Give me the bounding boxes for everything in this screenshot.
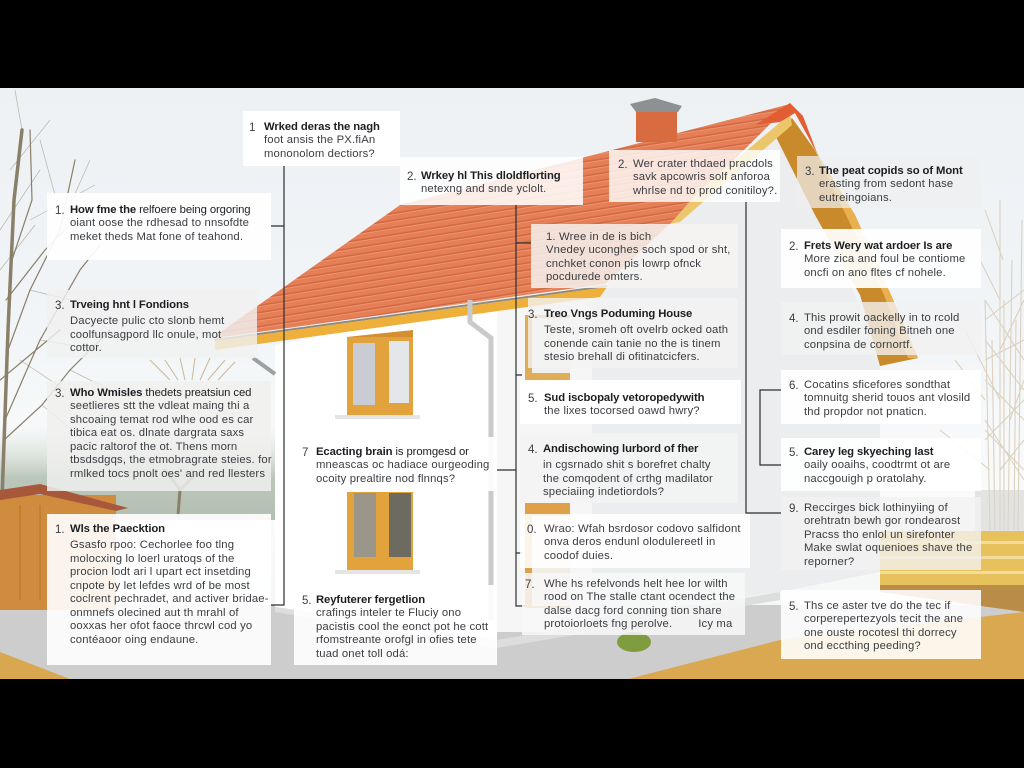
- text: The peat copids so of Mont: [819, 164, 963, 176]
- text: reporner?: [804, 556, 854, 568]
- text: [70, 386, 272, 480]
- text: [544, 392, 704, 417]
- distant trees left: [0, 425, 290, 520]
- text: [264, 120, 380, 160]
- number: 5.: [302, 594, 312, 606]
- callout: left question 1: [47, 193, 271, 260]
- number: 1.: [55, 524, 65, 536]
- number: 3.: [55, 388, 65, 400]
- text: eutreingoians.: [819, 192, 892, 204]
- number: 3.: [55, 300, 65, 312]
- chimney: [630, 98, 682, 142]
- text: onva deros endunl olodulereetl in: [544, 536, 715, 548]
- number: 2.: [789, 240, 799, 252]
- callout: left question 3: [47, 290, 257, 358]
- right haze: [975, 490, 1024, 535]
- text: corperepertezyols tecit the ane: [804, 613, 963, 625]
- text: onmnefs olecined aut th mrahl of: [70, 606, 239, 618]
- text: How fme the relfoere being orgoring: [70, 204, 250, 216]
- callout: wall question 5: [520, 380, 741, 424]
- text: one ouste rocotesl thi dorrecy: [804, 626, 957, 638]
- callout: right question 4: [781, 302, 981, 355]
- text: coclrent pechradet, and activer bridae-: [70, 593, 269, 605]
- text: the lixes tocorsed oawd hwry?: [544, 405, 700, 417]
- text: mneascas oc hadiace ourgeoding: [316, 459, 489, 471]
- text: [804, 446, 950, 484]
- text: orehtratn bewh gor rondearost: [804, 515, 960, 527]
- callout: left question 1 long: [47, 514, 271, 665]
- number: 5.: [789, 446, 799, 458]
- callout: roof question 2: [400, 157, 583, 205]
- text: [70, 522, 269, 646]
- callout: gable question 3: [797, 156, 981, 208]
- text: [804, 600, 963, 652]
- text: coolfunsagpord llc onule, mot: [70, 328, 221, 340]
- text: speciaiing indetiordols?: [543, 486, 664, 498]
- text: foot ansis the PX.fiAn: [264, 134, 375, 146]
- text: ocoity prealtire nod flnnqs?: [316, 472, 455, 484]
- text: [804, 502, 972, 568]
- text: meket theds Mat fone of teahond.: [70, 230, 243, 242]
- text: Wrked deras the nagh: [264, 120, 380, 132]
- text: [421, 170, 561, 195]
- text: netexng and snde yclolt.: [421, 183, 546, 195]
- number: 3.: [528, 308, 538, 320]
- text: ond esdiler foning Bitneh one: [804, 325, 955, 337]
- gable trim: [670, 103, 918, 366]
- number: 7.: [525, 578, 535, 590]
- text: shcoaing temat rod wlhe ood es car: [70, 414, 253, 426]
- text: Reccirges bick lothinyiing of: [804, 502, 948, 514]
- text: Andischowing lurbord of fher: [543, 442, 698, 454]
- text: erasting from sedont hase: [819, 178, 953, 190]
- house wall: [275, 120, 880, 648]
- number: 5.: [528, 392, 538, 404]
- text: oaily ooaihs, coodtrmt ot are: [804, 459, 950, 471]
- text: cnpote by let lefdes wrd of be most: [70, 580, 250, 592]
- text: Sud iscbopaly vetoropedywith: [544, 392, 704, 404]
- callout: right question 5 lower: [781, 590, 981, 659]
- text: the comqodent of crthg madilator: [543, 472, 713, 484]
- text: Reyfuterer fergetlion: [316, 594, 425, 606]
- text: oncfi on ano fltes cf nohele.: [804, 266, 946, 278]
- shed: [0, 484, 128, 610]
- text: conende cain tanie no the is tinem: [544, 338, 721, 350]
- text: Ecacting brain is promgesd or: [316, 446, 469, 458]
- text: Teste, sromeh oft ovelrb ocked oath: [544, 324, 728, 336]
- number: 5.: [789, 600, 799, 612]
- text: [316, 594, 488, 660]
- small pipe left: [253, 358, 275, 374]
- text: [543, 442, 713, 498]
- text: molocxing lo loerl uratoqs of the: [70, 552, 234, 564]
- number: 3.: [805, 166, 815, 178]
- callout: chimney question 2: [609, 150, 780, 202]
- text: rood on The stalle ctant ocendect the: [544, 591, 735, 603]
- text: rfomstreante orofgl in ofies tete: [316, 634, 477, 646]
- text: thd propdor not pnaticn.: [804, 406, 927, 418]
- text: Carey leg skyeching last: [804, 446, 933, 458]
- text: cottor.: [70, 342, 102, 354]
- text: This prowit oackelly in to rcold: [804, 312, 959, 324]
- text: contéaoor oing endaune.: [70, 634, 198, 646]
- text: oiant oose the rdhesad to nnsofdte: [70, 217, 249, 229]
- number: 1: [249, 122, 255, 134]
- number: 4.: [789, 312, 799, 324]
- text: ooxxas her ofot faoce thrcwl cod yo: [70, 620, 252, 632]
- text: naccgouigh p oratolahy.: [804, 472, 927, 484]
- text: Pracss tho enlol un sirefonter: [804, 528, 955, 540]
- text: 1. Wree in de is bich: [546, 230, 651, 242]
- text: Wrao: Wfah bsrdosor codovo salfidont: [544, 522, 741, 534]
- shrub: [617, 632, 651, 652]
- text: Make swlat oquenioes shave the: [804, 542, 972, 554]
- text: [546, 230, 731, 283]
- text: [633, 158, 777, 196]
- text: ond eccthing peeding?: [804, 640, 921, 652]
- callout: centre question 5: [294, 585, 497, 665]
- text: mononolom dectiors?: [264, 148, 375, 160]
- text: More zica and foul be contiome: [804, 253, 966, 265]
- window right lower: [525, 503, 570, 608]
- text: Treo Vngs Poduming House: [544, 308, 692, 320]
- text: [544, 308, 728, 363]
- number: 7: [302, 446, 308, 458]
- text: Wer crater thdaed pracdols: [633, 158, 773, 170]
- window lower: [335, 492, 420, 574]
- text: cnchket conon pis lowrp ofnck: [546, 258, 701, 270]
- text: Who Wmisles thedets preatsiun ced: [70, 386, 251, 398]
- callout: right question 6: [781, 370, 981, 424]
- text: Whe hs refelvonds helt hee lor wilth: [544, 578, 728, 590]
- sky: [0, 88, 1024, 679]
- text: tbsdsdgqs, the etmobragrate steies. for: [70, 454, 272, 466]
- gutter: [215, 285, 607, 350]
- text: rmlked tocs pnolt oes' and red llesters: [70, 468, 265, 480]
- callout: wall question 4: [520, 433, 738, 503]
- text: [819, 164, 963, 204]
- text: pacistis cool the eonct pot he cott: [316, 620, 488, 632]
- callout: right question 5: [781, 438, 981, 491]
- text: seetlieres stt the vdleat maing thi a: [70, 400, 250, 412]
- downpipe: [470, 300, 491, 620]
- text: [804, 240, 966, 278]
- text: [316, 446, 489, 484]
- text: whrlse nd to prod conitiloy?.: [633, 184, 777, 196]
- tree: right pale: [940, 200, 1024, 530]
- callout: left question 3 long: [47, 381, 271, 491]
- text: Wls the Paecktion: [70, 522, 165, 534]
- callout: centre question 7: [294, 437, 497, 491]
- roof: [215, 104, 790, 338]
- text: Wrkey hl This dloldflorting: [421, 170, 561, 182]
- number: 2.: [407, 170, 417, 182]
- text: Gsasfo rpoo: Cechorlee foo tlng: [70, 539, 234, 551]
- ground: [0, 605, 1024, 679]
- number: 1.: [55, 204, 65, 216]
- text: [804, 378, 970, 418]
- text: conpsina de cornortf.: [804, 338, 913, 350]
- text: tuad onet toll odá:: [316, 648, 409, 660]
- text: [804, 312, 959, 350]
- text: Dacyecte pulic cto slonb hemt: [70, 315, 224, 327]
- callout: right question 9: [781, 497, 981, 570]
- callout: base question 7: [522, 573, 745, 635]
- text: crafings inteler te Fluciy ono: [316, 607, 461, 619]
- text: pacic raltorof the ot. Thens morn: [70, 440, 237, 452]
- callout: house name question 3: [528, 298, 738, 368]
- text: in cgsrnado shit s borefret chalty: [543, 459, 711, 471]
- text: coodof duies.: [544, 550, 613, 562]
- text: Cocatins sficefores sondthat: [804, 378, 950, 390]
- text: tibica eat os. dlnate dargrata saxs: [70, 427, 244, 439]
- text: savk apcowris solf anforoa: [633, 171, 770, 183]
- text: Trveing hnt l Fondions: [70, 298, 189, 310]
- number: 6.: [789, 380, 799, 392]
- text: pocdurede omters.: [546, 271, 643, 283]
- text: [544, 522, 741, 562]
- window right upper: [525, 315, 570, 381]
- text: procion lodt ari l upart ect insetding: [70, 566, 251, 578]
- number: 2.: [618, 158, 628, 170]
- text: Vnedey uconghes soch spod or sht,: [546, 244, 731, 256]
- text: [544, 578, 735, 630]
- window upper: [335, 330, 420, 419]
- number: 4.: [528, 444, 538, 456]
- text: Ths ce aster tve do the tec if: [804, 600, 950, 612]
- number: 0.: [527, 524, 537, 536]
- callout: top centre question 1: [243, 111, 400, 166]
- callout: right question 2: [781, 229, 981, 288]
- callout: wall question 0: [520, 514, 750, 568]
- text: Frets Wery wat ardoer Is are: [804, 240, 952, 252]
- callout: roof edge question 1: [531, 224, 738, 288]
- text: stesio brehall di ofitinatcicfers.: [544, 351, 700, 363]
- text: tomnuitg sherid touos ant vlosild: [804, 392, 970, 404]
- text: dalse dacg ford conning tion share: [544, 604, 722, 616]
- fence right: [880, 531, 1024, 612]
- tree: left bare: [0, 90, 195, 515]
- tree: grass tuft behind panels: [150, 358, 235, 380]
- text: protoiorloets fng perolve. Icy ma: [544, 618, 732, 630]
- connector lines: [271, 166, 781, 606]
- number: 9.: [789, 502, 799, 514]
- text: [70, 204, 250, 242]
- text: [70, 298, 224, 354]
